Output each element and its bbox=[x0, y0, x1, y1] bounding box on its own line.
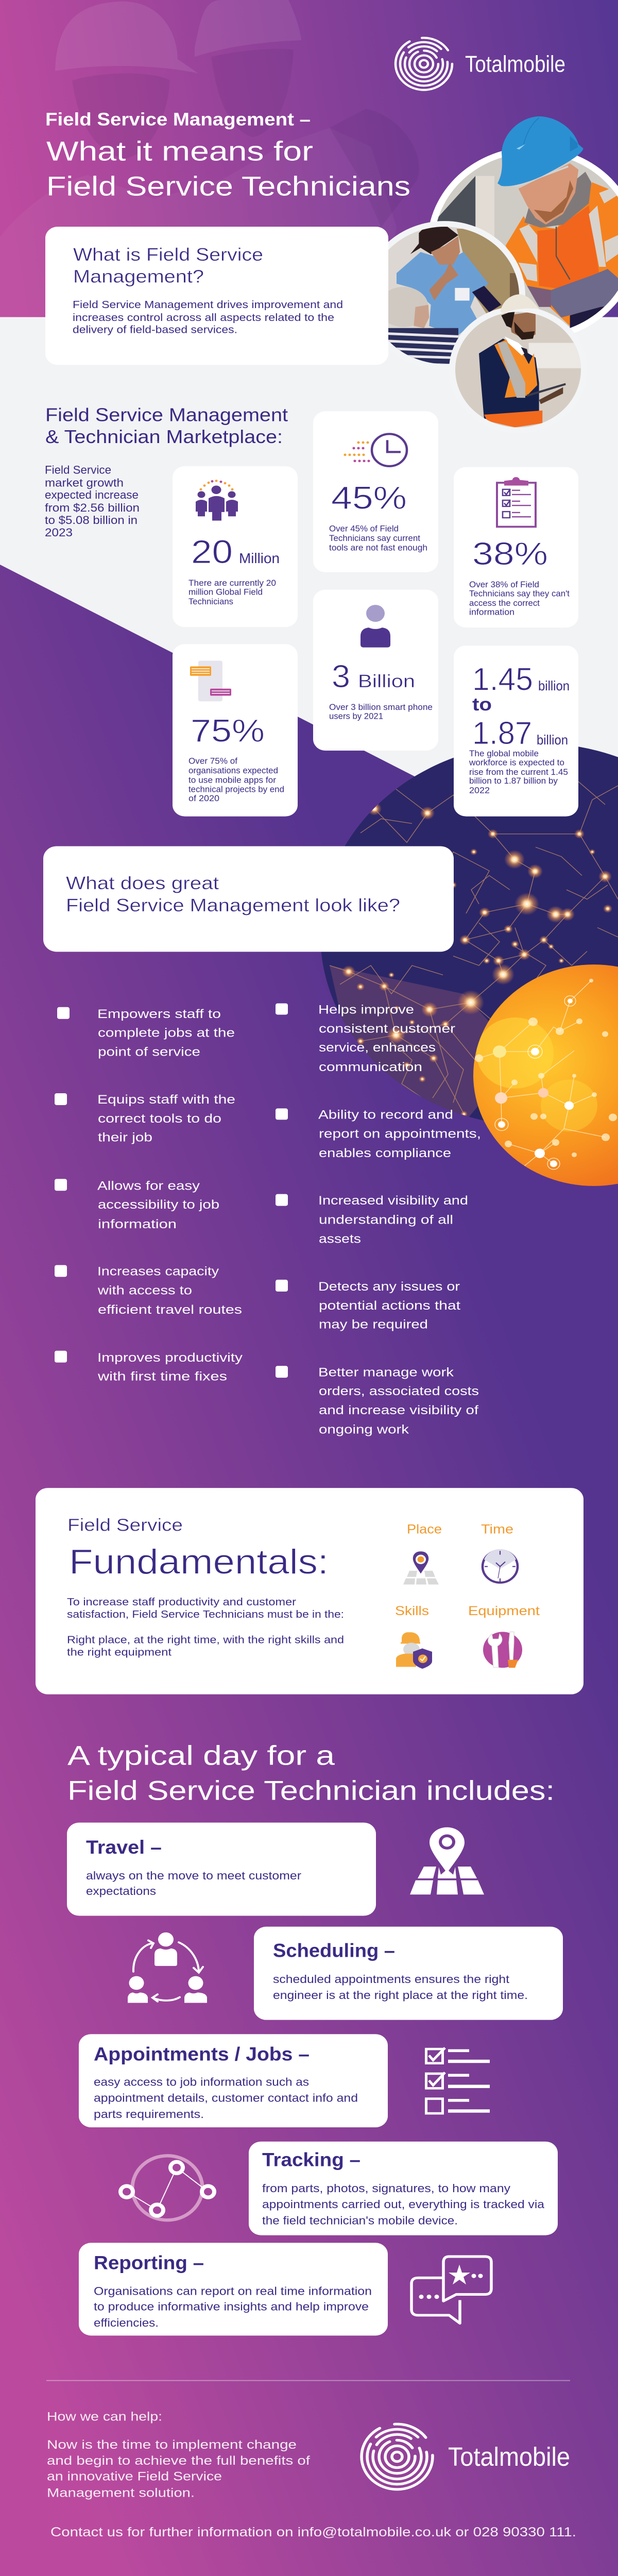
card: tracking: the field technician's mobile device. bbox=[262, 2214, 458, 2227]
item: detects issues: may be required bbox=[319, 1317, 428, 1331]
card: appointments: appointment details, customer contact info and bbox=[94, 2091, 358, 2104]
item: allows for easy: Allows for easy bbox=[97, 1179, 200, 1193]
text: market growth: Field Service bbox=[45, 463, 111, 476]
item: increases capacity: efficient travel routes bbox=[98, 1303, 242, 1317]
panel: what does great FSM look like bbox=[43, 846, 454, 952]
card: 1.45 to 1.87 billion: to bbox=[472, 694, 492, 714]
card: 1.45 to 1.87 billion: workforce is expected to bbox=[469, 757, 564, 767]
item: allows for easy: information bbox=[98, 1217, 177, 1231]
text: how we can help bbox=[47, 2410, 310, 2500]
card: 75% bbox=[173, 644, 298, 817]
purple diagonal background bbox=[0, 565, 618, 2576]
heading: marketplace bbox=[45, 404, 288, 447]
icon: time bbox=[481, 1522, 518, 1583]
icon: place bbox=[403, 1522, 442, 1585]
title: What it means for bbox=[46, 136, 313, 166]
heading: marketplace: Field Service Management bbox=[45, 404, 288, 425]
card: 1.45 to 1.87 billion: rise from the current 1.45 bbox=[469, 767, 568, 777]
item: better manage: ongoing work bbox=[319, 1422, 409, 1436]
item: increased visibility: assets bbox=[319, 1232, 361, 1246]
item: equips staff bbox=[55, 1093, 235, 1144]
card: tracking: appointments carried out, everything is tracked via bbox=[262, 2198, 544, 2211]
panel: field service fundamentals: Right place, at the right time, with the right skills and bbox=[67, 1634, 344, 1646]
card: 45% bbox=[313, 411, 438, 572]
card: 38%: information bbox=[469, 607, 514, 617]
card: tracking bbox=[249, 2142, 558, 2235]
card: appointments: easy access to job information such as bbox=[94, 2075, 309, 2088]
card: reporting: Organisations can report on real time information bbox=[94, 2284, 372, 2297]
item: ability to record: Ability to record and bbox=[318, 1108, 453, 1122]
title: Field Service Technicians bbox=[46, 171, 410, 201]
item: better manage: and increase visibility of bbox=[319, 1403, 478, 1417]
panel: what is field service management: delivery of field-based services. bbox=[73, 324, 237, 335]
card: 3 billion: Billion bbox=[358, 671, 415, 691]
item: better manage bbox=[276, 1365, 479, 1436]
photo: technician with blue hard hat bbox=[426, 116, 618, 347]
icon: equipment: Equipment bbox=[468, 1604, 540, 1618]
panel: what is field service management: increases control across all aspects related to the bbox=[73, 312, 334, 324]
item: helps improve: consistent customer bbox=[319, 1022, 455, 1036]
text: market growth: 2023 bbox=[45, 526, 73, 539]
panel: field service fundamentals: satisfaction, Field Service Technicians must be in the: bbox=[67, 1609, 344, 1620]
card: appointments: Appointments / Jobs – bbox=[94, 2044, 310, 2065]
heading: typical day bbox=[67, 1740, 555, 1806]
item: increased visibility: Increased visibility and bbox=[318, 1194, 468, 1208]
card: 3 billion: 3 bbox=[332, 658, 350, 694]
card: 45%: Technicians say current bbox=[329, 533, 420, 543]
card: 1.45 to 1.87 billion: billion bbox=[538, 679, 570, 693]
card: 20 million: Technicians bbox=[188, 597, 233, 606]
card: 75%: to use mobile apps for bbox=[188, 775, 276, 785]
card: travel: expectations bbox=[86, 1885, 156, 1897]
card: 38%: access the correct bbox=[469, 598, 540, 608]
icon: skills: Skills bbox=[395, 1604, 429, 1618]
icon: three people bbox=[196, 480, 238, 520]
card: scheduling: engineer is at the right place at the right time. bbox=[273, 1989, 528, 2002]
card: 38%: Technicians say they can't bbox=[469, 588, 570, 598]
card: 20 million: 20 bbox=[191, 534, 233, 570]
card: 1.45 to 1.87 billion: billion to 1.87 billion by bbox=[469, 776, 558, 786]
item: increased visibility: understanding of all bbox=[319, 1213, 453, 1227]
item: better manage: Better manage work bbox=[318, 1365, 454, 1379]
panel: what is field service management: What is Field Service bbox=[73, 245, 263, 265]
icon: skills bbox=[395, 1604, 432, 1669]
item: ability to record: report on appointments, bbox=[319, 1127, 481, 1141]
card: 1.45 to 1.87 billion: 1.45 bbox=[472, 661, 533, 697]
card: 3 billion: users by 2021 bbox=[329, 711, 383, 721]
text: how we can help: an innovative Field Service bbox=[47, 2469, 222, 2483]
item: detects issues: potential actions that bbox=[319, 1299, 460, 1313]
card: reporting: to produce informative insights and help improve bbox=[94, 2300, 369, 2313]
item: better manage: orders, associated costs bbox=[319, 1384, 479, 1398]
icon: person bbox=[360, 605, 390, 648]
item: allows for easy bbox=[55, 1179, 219, 1231]
card: appointments bbox=[79, 2034, 388, 2127]
item: ability to record bbox=[276, 1108, 481, 1160]
item: detects issues bbox=[276, 1280, 460, 1331]
panel: field service fundamentals bbox=[36, 1488, 583, 1694]
item: increased visibility bbox=[276, 1194, 468, 1246]
text: how we can help: How we can help: bbox=[47, 2410, 162, 2424]
item: increases capacity: with access to bbox=[97, 1283, 192, 1297]
card: 1.45 to 1.87 billion: 1.87 bbox=[472, 715, 532, 751]
icon: time: Time bbox=[481, 1522, 513, 1536]
card: tracking: from parts, photos, signatures, to how many bbox=[262, 2182, 511, 2195]
card: 3 billion bbox=[313, 590, 438, 751]
panel: what is field service management bbox=[45, 227, 388, 365]
card: 45%: Over 45% of Field bbox=[329, 523, 399, 533]
panel: what is field service management: Field Service Management drives improvement and bbox=[73, 299, 343, 311]
icon: people cycle bbox=[128, 1933, 207, 2003]
item: empowers staff bbox=[57, 1007, 235, 1059]
list: left column bbox=[55, 1007, 243, 1383]
item: detects issues: Detects any issues or bbox=[318, 1280, 460, 1294]
item: empowers staff: Empowers staff to bbox=[97, 1007, 221, 1021]
icon: equipment bbox=[468, 1604, 540, 1668]
panel: field service fundamentals: Field Service bbox=[67, 1515, 183, 1535]
card: 38%: 38% bbox=[472, 535, 548, 571]
text: market growth bbox=[45, 463, 140, 539]
text: market growth: to $5.08 billion in bbox=[45, 514, 138, 527]
heading: typical day: A typical day for a bbox=[67, 1740, 335, 1771]
card: scheduling: Scheduling – bbox=[273, 1940, 395, 1961]
card: scheduling: scheduled appointments ensures the right bbox=[273, 1973, 510, 1986]
icon: chat bubbles bbox=[411, 2257, 491, 2323]
logo: Totalmobile top bbox=[396, 38, 565, 90]
card: 75%: of 2020 bbox=[188, 793, 219, 803]
card: reporting: efficiencies. bbox=[94, 2316, 159, 2329]
icon: clipboard bbox=[497, 477, 536, 527]
heading: marketplace: & Technician Marketplace: bbox=[45, 426, 283, 447]
item: increases capacity bbox=[55, 1265, 242, 1317]
text: market growth: expected increase bbox=[45, 488, 139, 501]
photo: nurse with elderly patient bbox=[388, 221, 525, 364]
item: improves productivity bbox=[55, 1351, 243, 1383]
item: improves productivity: Improves productivity bbox=[97, 1351, 243, 1365]
item: improves productivity: with first time fixes bbox=[97, 1370, 227, 1383]
icon: map pin bbox=[410, 1827, 484, 1894]
item: helps improve: communication bbox=[319, 1060, 422, 1074]
card: 75%: organisations expected bbox=[188, 766, 278, 775]
text: market growth: market growth bbox=[45, 476, 124, 489]
item: helps improve bbox=[276, 1003, 455, 1074]
photo: engineer with white hard hat and tablet bbox=[449, 294, 587, 433]
heading: typical day: Field Service Technician includes: bbox=[67, 1775, 555, 1806]
card: 20 million bbox=[173, 466, 298, 627]
panel: what does great FSM look like: Field Service Management look like? bbox=[66, 895, 400, 916]
card: travel: always on the move to meet customer bbox=[86, 1869, 301, 1882]
item: equips staff: their job bbox=[98, 1131, 152, 1144]
list: right column bbox=[276, 1003, 481, 1436]
text: how we can help: and begin to achieve the full benefits of bbox=[47, 2454, 310, 2468]
icon: place: Place bbox=[407, 1522, 442, 1536]
panel: what is field service management: Management? bbox=[73, 266, 204, 286]
panel: field service fundamentals: To increase staff productivity and customer bbox=[67, 1597, 296, 1608]
logo: Totalmobile bottom: Totalmobile bbox=[448, 2442, 570, 2471]
card: 1.45 to 1.87 billion: 2022 bbox=[469, 785, 490, 795]
title bbox=[45, 109, 410, 201]
card: 75%: Over 75% of bbox=[188, 756, 237, 766]
item: equips staff: Equips staff with the bbox=[97, 1093, 235, 1107]
item: helps improve: service, enhances bbox=[319, 1041, 436, 1055]
item: empowers staff: point of service bbox=[98, 1045, 200, 1059]
card: 75%: 75% bbox=[191, 713, 265, 749]
card: 20 million: million Global Field bbox=[188, 587, 263, 597]
card: 1.45 to 1.87 billion bbox=[454, 646, 578, 817]
panel: field service fundamentals: the right equipment bbox=[67, 1647, 171, 1658]
icon: fast clock bbox=[344, 434, 407, 466]
icon: tracking network bbox=[118, 2156, 216, 2220]
item: ability to record: enables compliance bbox=[319, 1146, 451, 1160]
card: 1.45 to 1.87 billion: The global mobile bbox=[469, 749, 539, 758]
globe: night network bbox=[320, 743, 618, 1136]
card: travel: Travel – bbox=[86, 1837, 162, 1858]
card: appointments: parts requirements. bbox=[94, 2108, 204, 2121]
logo: Totalmobile top: Totalmobile bbox=[465, 51, 565, 77]
title: Field Service Management – bbox=[45, 109, 311, 129]
orange network sphere bbox=[473, 964, 618, 1186]
panel: what does great FSM look like: What does great bbox=[66, 873, 219, 893]
card: 75%: technical projects by end bbox=[188, 784, 284, 794]
item: equips staff: correct tools to do bbox=[98, 1112, 221, 1126]
item: helps improve: Helps improve bbox=[318, 1003, 414, 1016]
text: how we can help: Management solution. bbox=[47, 2486, 195, 2500]
card: reporting bbox=[79, 2243, 388, 2335]
text: market growth: from $2.56 billion bbox=[45, 501, 140, 514]
card: reporting: Reporting – bbox=[94, 2252, 204, 2274]
card: 45%: tools are not fast enough bbox=[329, 543, 427, 552]
contact line: Contact us for further information on info@totalmobile.co.uk or 028 90330 111. bbox=[50, 2526, 576, 2539]
card: 38%: Over 38% of Field bbox=[469, 580, 539, 589]
card: 1.45 to 1.87 billion: billion bbox=[537, 733, 568, 748]
card: scheduling bbox=[254, 1927, 563, 2020]
item: increases capacity: Increases capacity bbox=[97, 1265, 219, 1278]
card: 20 million: There are currently 20 bbox=[188, 578, 276, 588]
card: 20 million: Million bbox=[239, 551, 280, 567]
logo: Totalmobile bottom bbox=[362, 2424, 570, 2489]
text: how we can help: Now is the time to implement change bbox=[47, 2438, 297, 2452]
card: 45%: 45% bbox=[331, 480, 407, 516]
icon: checklist bbox=[426, 2048, 490, 2113]
item: empowers staff: complete jobs at the bbox=[98, 1026, 235, 1040]
card: tracking: Tracking – bbox=[262, 2149, 360, 2171]
header gradient band with faint workers photo bbox=[0, 0, 618, 317]
panel: field service fundamentals: Fundamentals: bbox=[69, 1543, 329, 1582]
card: travel bbox=[67, 1823, 376, 1916]
icon: phone messages bbox=[190, 660, 231, 701]
card: 38% bbox=[454, 467, 578, 628]
card: 3 billion: Over 3 billion smart phone bbox=[329, 702, 433, 712]
item: allows for easy: accessibility to job bbox=[98, 1198, 219, 1212]
